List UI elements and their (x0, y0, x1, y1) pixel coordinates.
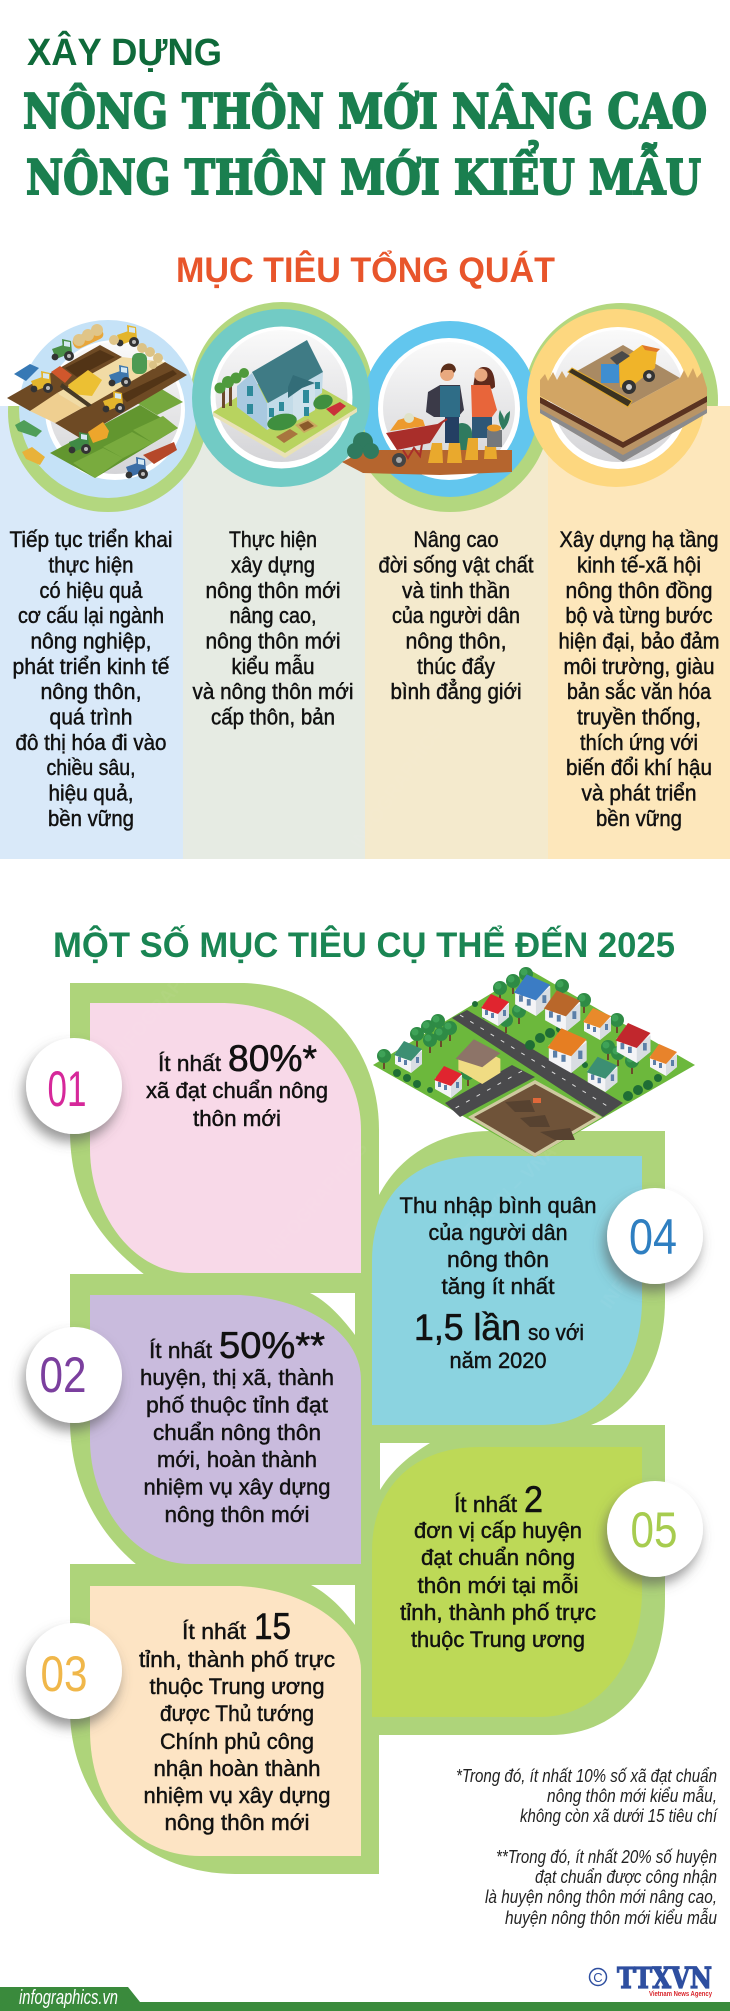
logo: TTXVN: C (593, 1970, 603, 1985)
text block: column 2: kiểu mẫu (232, 654, 314, 679)
text block: column 3: nông thôn, (406, 628, 506, 654)
icon: number 04: 04 (629, 1209, 677, 1265)
text block: column 4: bản sắc văn hóa (567, 679, 712, 704)
text: goal 03: nhiệm vụ xây dựng (144, 1783, 330, 1808)
text: goal 02: phố thuộc tỉnh đạt (146, 1392, 328, 1418)
text: goal 04: năm 2020 (450, 1348, 546, 1373)
text block: column 4: truyền thống, (577, 704, 701, 730)
panel: goal 02 (90, 1295, 361, 1564)
icon: number 01: 01 (48, 1061, 86, 1117)
text block: column 4: nông thôn đồng (566, 578, 712, 603)
text block: column 4: bền vững (596, 806, 682, 831)
text: goal 04 (400, 1193, 596, 1373)
text block: column 2: cấp thôn, bản (211, 704, 335, 730)
text block: column 1: chiều sâu, (46, 755, 136, 780)
text block: column 3: bình đẳng giới (390, 679, 522, 704)
text block: column 3: đời sống vật chất (378, 552, 534, 578)
text: goal 01: xã đạt chuẩn nông (146, 1078, 328, 1103)
icon: circle 2 house (210, 326, 357, 468)
text block: column 4: bộ và từng bước (566, 603, 712, 628)
text: goal 02: mới, hoàn thành (157, 1447, 317, 1472)
text: goal 02 (140, 1325, 334, 1527)
text: goal 05: thuộc Trung ương (411, 1627, 585, 1652)
icon: circle 1 farm machinery (7, 324, 187, 480)
text block: column 4: Xây dựng hạ tầng (560, 527, 718, 552)
watermarks (108, 721, 698, 1313)
watermarks: INFOGRAPHICS (597, 1181, 698, 1313)
text: goal 04: 1,5 lần (414, 1307, 521, 1348)
text block: column 4: biến đổi khí hậu (566, 755, 712, 780)
heading: mục tiêu tổng quát: MỤC TIÊU TỔNG QUÁT (176, 250, 555, 290)
text: goal 01 (146, 1038, 328, 1131)
text: goal 03: 15 (254, 1606, 291, 1647)
text block: column 3: của người dân (392, 603, 520, 628)
text: goal 05: thôn mới tại mỗi (418, 1573, 578, 1598)
text block: column 4: môi trường, giàu (564, 654, 714, 679)
text block: column 4 (558, 527, 720, 831)
text: goal 04: nông thôn (447, 1247, 549, 1272)
logo: TTXVN (590, 1961, 712, 1998)
circle backdrops (8, 302, 718, 512)
text: goal 02: Ít nhất (149, 1338, 212, 1363)
logo: TTXVN: TTXVN (617, 1961, 712, 1995)
text: goal 02: chuẩn nông thôn (153, 1420, 321, 1445)
text: goal 04: so với (528, 1320, 584, 1345)
heading: một số mục tiêu cụ thể đến 2025: MỘT SỐ MỤC TIÊU CỤ THỂ ĐẾN 2025 (53, 925, 675, 965)
footer label: infographics.vn (19, 1987, 118, 2009)
text: goal 01: thôn mới (193, 1106, 281, 1131)
logo: TTXVN: Vietnam News Agency (649, 1991, 712, 1998)
text block: column 1: phát triển kinh tế (12, 654, 170, 679)
text block: column 2: Thực hiện (229, 527, 317, 552)
text block: column 4: và phát triển (582, 780, 696, 806)
icon: number 04 (607, 1188, 703, 1284)
icon: number 02: 02 (40, 1347, 86, 1403)
text block: column 4: kinh tế-xã hội (577, 552, 701, 578)
text: goal 04: của người dân (428, 1220, 568, 1245)
panel: goal 04 (372, 1156, 642, 1425)
text block: column 1: nông thôn, (40, 679, 142, 704)
text: goal 03: thuộc Trung ương (150, 1674, 324, 1699)
text: goal 03: được Thủ tướng (160, 1701, 314, 1726)
text block: column 3: và tinh thần (402, 578, 510, 603)
text: goal 03: nhận hoàn thành (154, 1756, 320, 1781)
icon: number 03: 03 (40, 1646, 88, 1702)
text block: column 3: thúc đẩy (417, 654, 495, 679)
text block: column 2: và nông thôn mới (192, 679, 354, 704)
footnotes (456, 1766, 719, 1928)
text block: column 1: nông nghiệp, (30, 628, 152, 654)
heading: xây dựng: XÂY DỰNG (27, 30, 222, 74)
text: goal 05: Ít nhất (454, 1492, 517, 1517)
icon: number 03 (26, 1623, 122, 1719)
text block: column 1: Tiếp tục triển khai (10, 527, 172, 552)
icon: village (373, 967, 695, 1157)
text: goal 02: 50%** (219, 1325, 325, 1366)
panel: goal 05 (372, 1447, 642, 1717)
text block: column 1: quá trình (50, 704, 132, 730)
text: goal 01: 80%* (228, 1038, 317, 1079)
panel: goal 01 (90, 1003, 361, 1273)
text block: column 1: đô thị hóa đi vào (16, 730, 166, 755)
text block: column 3: Nâng cao (414, 527, 498, 552)
text: goal 03: Ít nhất (182, 1619, 246, 1644)
text block: column 1: có hiệu quả (40, 578, 143, 603)
icon: circle 4 harvester (540, 327, 707, 469)
text: goal 05 (400, 1479, 596, 1652)
text: goal 03: nông thôn mới (164, 1810, 310, 1835)
text: goal 03 (139, 1606, 335, 1835)
watermarks: TTXVN – VNA (459, 1141, 561, 1244)
icon: number 01 (26, 1038, 122, 1134)
text: goal 03: tỉnh, thành phố trực (139, 1647, 335, 1672)
text block: column 1: hiệu quả, (48, 780, 134, 806)
text block: column 1: thực hiện (48, 552, 134, 578)
panel frames: green leaf outlines (70, 983, 665, 1874)
text block: column 4: thích ứng với (580, 730, 698, 755)
watermarks: INFOGRAPHICS (108, 940, 217, 1065)
watermarks: INFOGRAPHICS (263, 1138, 372, 1263)
text block: column 1: cơ cấu lại ngành (18, 603, 164, 628)
text: goal 01: Ít nhất (158, 1051, 221, 1076)
text block: column 2: nông thôn mới (206, 628, 340, 654)
icon: circle 3 farmers (342, 338, 520, 480)
panel: goal 03 (90, 1586, 361, 1856)
text block: column 2: nông thôn mới (206, 578, 340, 603)
text: goal 05: đạt chuẩn nông (421, 1545, 575, 1570)
icon: number 05: 05 (630, 1502, 678, 1558)
text: goal 02: nhiệm vụ xây dựng (144, 1474, 330, 1500)
text: goal 02: huyện, thị xã, thành (140, 1365, 334, 1390)
icon: number 02 (26, 1327, 122, 1423)
text: goal 05: đơn vị cấp huyện (414, 1518, 582, 1543)
text: goal 03: Chính phủ công (160, 1729, 314, 1754)
text: goal 05: 2 (524, 1479, 543, 1520)
text: goal 02: nông thôn mới (164, 1502, 310, 1527)
watermarks: INFOGRAPHICS (347, 721, 448, 853)
text: goal 04: tăng ít nhất (442, 1274, 554, 1299)
title block (23, 30, 707, 206)
footer band (0, 1987, 730, 2011)
icon: number 05 (607, 1481, 703, 1577)
text: goal 04: Thu nhập bình quân (400, 1193, 596, 1218)
text block: column 2 (192, 527, 354, 730)
text block: column 1 (10, 527, 172, 831)
text block: column 2: nâng cao, (230, 603, 316, 628)
text block: column 2: xây dựng (231, 552, 315, 578)
panel: column backgrounds (0, 406, 730, 859)
text: goal 05: tỉnh, thành phố trực (400, 1600, 596, 1625)
text block: column 3 (378, 527, 534, 704)
text block: column 4: hiện đại, bảo đảm (558, 628, 720, 654)
text block: column 1: bền vững (48, 806, 134, 831)
